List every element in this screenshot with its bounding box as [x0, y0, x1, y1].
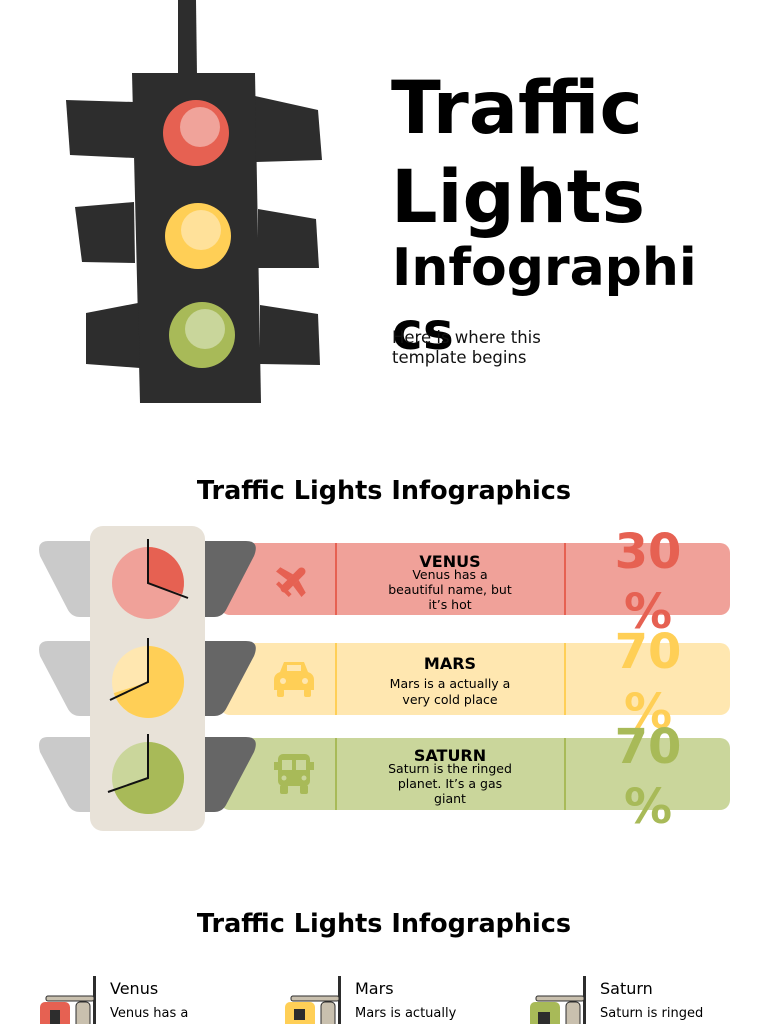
row text: venus	[388, 552, 512, 612]
bottom item saturn: Saturn is ringed	[600, 1006, 703, 1021]
icon car	[274, 662, 314, 697]
title: Lights	[391, 155, 645, 240]
title	[391, 66, 645, 240]
row text: mars: Mars is a actually a	[390, 676, 510, 691]
pie 70% yellow	[110, 638, 184, 718]
bottom item venus	[40, 976, 188, 1024]
title: Traffic	[391, 66, 643, 151]
bottom item saturn	[530, 976, 703, 1024]
row text: venus: beautiful name, but	[388, 582, 512, 597]
bottom item venus: Venus	[110, 979, 158, 998]
percentages: 30	[615, 524, 681, 580]
row text: saturn: giant	[434, 791, 466, 806]
bottom item venus: Venus has a	[110, 1006, 188, 1021]
row text: saturn: SATURN	[414, 746, 486, 765]
pie 30%	[112, 539, 188, 619]
intro text: Here is where this	[392, 328, 541, 347]
row text: mars: MARS	[424, 654, 476, 673]
chart panel	[39, 526, 730, 831]
row text: venus: VENUS	[419, 552, 481, 571]
pie 70% green	[108, 734, 184, 814]
row text: venus: it’s hot	[428, 597, 472, 612]
text: 70	[615, 624, 681, 680]
text: 70	[615, 719, 681, 775]
icon plane	[269, 556, 317, 604]
row text: saturn: Saturn is the ringed	[388, 761, 512, 776]
text: %	[624, 779, 672, 835]
red light	[163, 100, 229, 166]
green light	[169, 302, 235, 368]
row text: venus: Venus has a	[412, 567, 488, 582]
text: %	[624, 684, 672, 740]
row text: mars: very cold place	[402, 692, 498, 707]
side wings	[39, 541, 256, 812]
subtitle heading: Infographics	[392, 238, 697, 362]
section heading 1: Traffic Lights Infographics	[197, 476, 571, 506]
intro text	[392, 328, 541, 367]
bottom item mars: Mars	[355, 979, 394, 998]
row bands	[220, 543, 730, 810]
intro text: template begins	[392, 348, 526, 367]
row text: mars	[390, 654, 510, 707]
bottom item mars	[285, 976, 456, 1024]
row text: saturn	[388, 746, 512, 806]
percentages: %	[624, 584, 672, 640]
icon bus	[274, 754, 314, 794]
row text: saturn: planet. It’s a gas	[398, 776, 502, 791]
percentages	[615, 524, 681, 640]
bottom item saturn: Saturn	[600, 979, 653, 998]
section heading 2: Traffic Lights Infographics	[197, 909, 571, 939]
bottom item mars: Mars is actually	[355, 1006, 456, 1021]
traffic light illustration	[66, 0, 322, 403]
yellow light	[165, 203, 231, 269]
